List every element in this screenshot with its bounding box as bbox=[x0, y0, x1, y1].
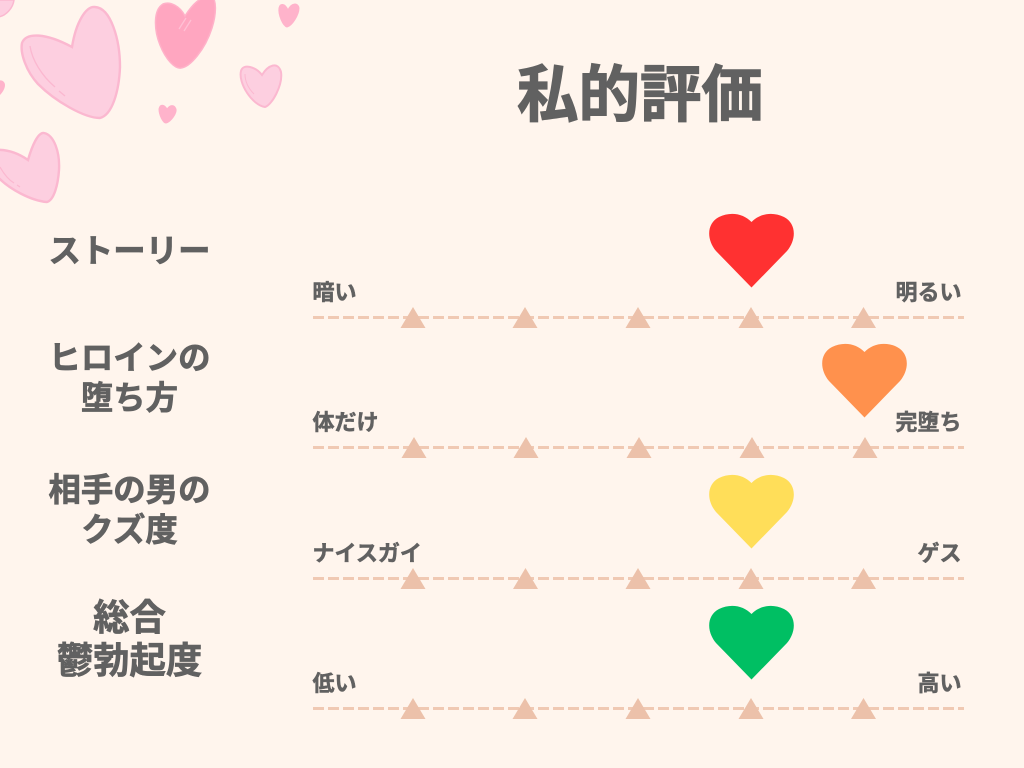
right label: bright: 明るい bbox=[895, 280, 962, 305]
scale 1 bbox=[313, 307, 964, 328]
category label: heroine: ヒロインの bbox=[49, 340, 210, 376]
category label: partner: 相手の男の bbox=[49, 472, 210, 508]
left label: low: 低い bbox=[312, 671, 357, 696]
right label: high: 高い bbox=[917, 671, 962, 696]
icon: left edge heart fragment bbox=[0, 80, 5, 95]
icon: lower-left pale heart bbox=[0, 133, 59, 202]
category label: heroine: 堕ち方 bbox=[81, 380, 178, 416]
icon: medium pale heart bbox=[241, 65, 281, 107]
category label: partner: クズ度 bbox=[81, 512, 178, 548]
icon: top-left heart fragment bbox=[0, 0, 14, 17]
rating heart: orange bbox=[822, 344, 907, 418]
category label: overall: 鬱勃起度 bbox=[57, 640, 202, 681]
scale 4 bbox=[313, 698, 964, 719]
category label: overall: 総合 bbox=[93, 597, 166, 638]
left label: dark: 暗い bbox=[312, 280, 357, 305]
right label: fully fallen: 完堕ち bbox=[895, 410, 962, 435]
category label: heroine bbox=[49, 340, 210, 416]
category label: partner bbox=[48, 472, 210, 548]
category label: story: ストーリー bbox=[49, 233, 210, 269]
icon: large pale heart bbox=[22, 7, 120, 118]
left label: body only: 体だけ bbox=[312, 410, 379, 435]
title: 私的評価 bbox=[517, 61, 763, 130]
decorative pink hearts bbox=[0, 0, 300, 204]
icon: tiny heart bbox=[159, 105, 176, 123]
rating heart: red bbox=[709, 214, 794, 288]
scale 3 bbox=[313, 568, 964, 589]
category label: overall bbox=[57, 597, 202, 681]
rating heart: green bbox=[709, 606, 794, 680]
left label: nice guy: ナイスガイ bbox=[312, 541, 422, 566]
icon: small top-right heart bbox=[279, 4, 299, 27]
scale 2 bbox=[313, 437, 964, 458]
icon: strong pink heart bbox=[155, 0, 215, 68]
rating heart: yellow bbox=[709, 474, 794, 548]
right label: scum: ゲス bbox=[917, 541, 962, 566]
